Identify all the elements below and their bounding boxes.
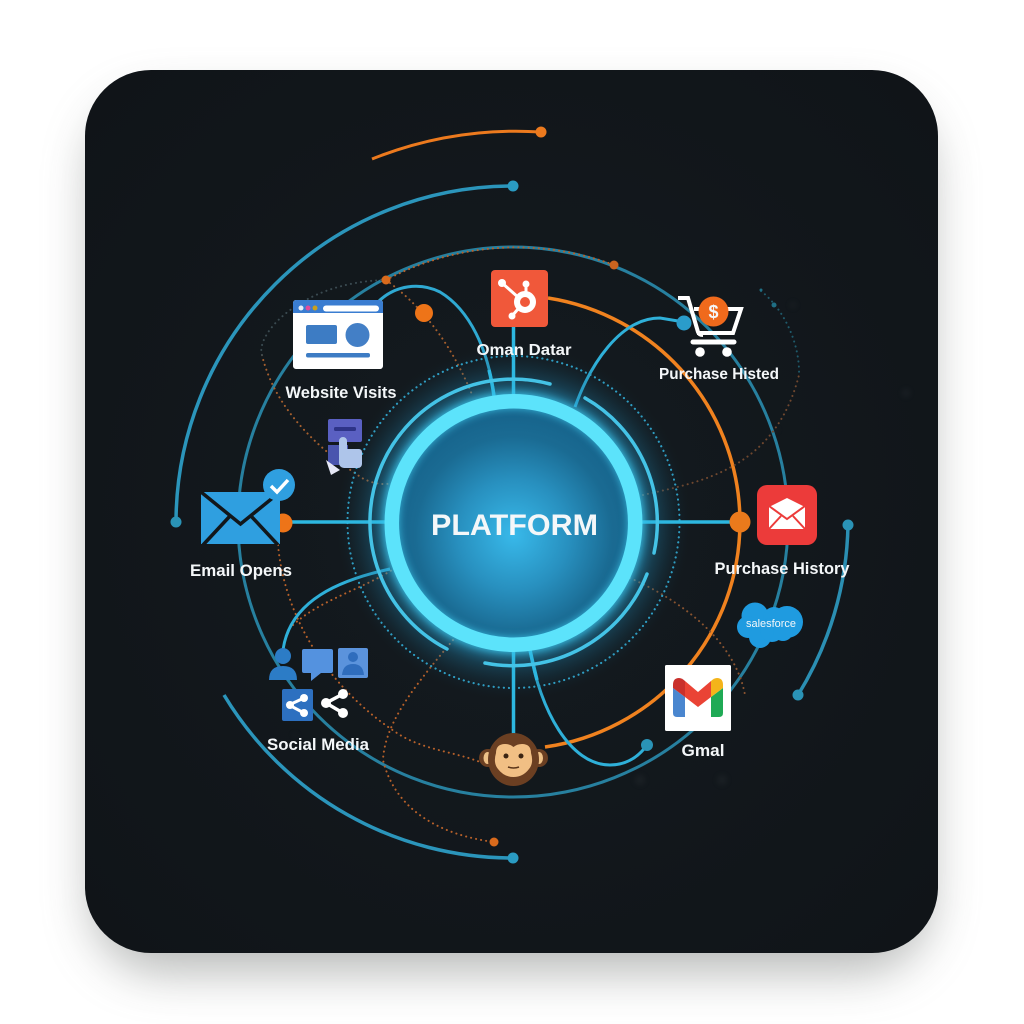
hub ring glow: [392, 401, 636, 645]
outer arc: top orange: [372, 131, 541, 159]
label: oman datar: Oman Datar: [476, 342, 572, 359]
label: email opens: Email Opens: [190, 562, 292, 580]
label: social media: Social Media: [267, 736, 370, 754]
thin ring arc: left: [370, 379, 550, 649]
hub ring: [392, 401, 635, 645]
icon: salesforce cloud: [737, 602, 803, 648]
icon: email envelope: [201, 469, 295, 545]
icon: share glyph: [321, 689, 348, 718]
orange arc: hubspot to monkey: [545, 298, 740, 747]
panel shadow: [92, 100, 930, 972]
dotted path: orange social: [293, 570, 392, 625]
orbit ring: [238, 247, 788, 797]
thin ring arc: right: [585, 398, 657, 553]
dotted rings: [261, 247, 799, 842]
dotted path: orange upper left: [386, 280, 473, 397]
hub glow: [334, 343, 694, 703]
icon: social media cluster: [269, 648, 368, 721]
icon: website browser: [293, 300, 383, 369]
dotted path: orange left: [262, 355, 412, 484]
icon: purchase history mail: [757, 485, 817, 545]
orbit end dots: [170, 126, 854, 864]
dotted path: orange right upper: [643, 375, 799, 495]
curve: cart to ring: [575, 318, 684, 407]
dotted ring overlay: [348, 356, 680, 688]
panel: dark rounded background: [85, 70, 938, 953]
icon: hubspot: [491, 270, 548, 327]
dotted path: teal upper right: [761, 291, 799, 375]
thin ring arc: bottom: [485, 574, 647, 666]
icon: chat bubble: [302, 649, 333, 681]
curve: social to ring: [283, 569, 390, 650]
dotted ring: inner: [348, 356, 680, 688]
dot: email connector: [274, 514, 292, 532]
icon: share square: [282, 689, 313, 721]
label: website visits: Website Visits: [286, 384, 396, 402]
background particles: [293, 302, 910, 785]
label: gmail: Gmal: [682, 742, 724, 760]
icon: shopping cart: [678, 296, 741, 357]
dotted arc: orange top: [386, 247, 614, 280]
dotted path: grey upper left: [261, 280, 386, 355]
title: platform: PLATFORM: [431, 509, 598, 542]
icon: shopping cart: $: [708, 302, 719, 322]
icon: click thumb: [326, 419, 362, 475]
dotted path: orange right lower: [630, 578, 745, 695]
curve: gmail to ring: [530, 650, 647, 765]
outer arc: right: [798, 525, 848, 695]
diagram: orbit lines: [176, 131, 848, 858]
hub: platform core: [285, 327, 740, 735]
curve: website to ring: [378, 286, 494, 395]
icon: gmail: [665, 665, 731, 731]
outer arc: bottom left: [224, 695, 513, 858]
dot: purchase connector: [730, 512, 750, 532]
icon: profile card: [338, 648, 368, 678]
label: purchase listed: Purchase Histed: [659, 366, 779, 383]
outer arc: top left: [176, 186, 513, 522]
dotted path: orange bottom: [383, 640, 494, 842]
connectors: spokes from core: [285, 327, 740, 735]
hub disc: [396, 405, 632, 641]
dotted path: orange lower left: [278, 545, 480, 762]
label: purchase history: Purchase History: [714, 560, 850, 578]
icon: salesforce cloud: salesforce: [746, 618, 796, 630]
icon: monkey: [479, 733, 548, 786]
icon: person: [269, 648, 297, 680]
